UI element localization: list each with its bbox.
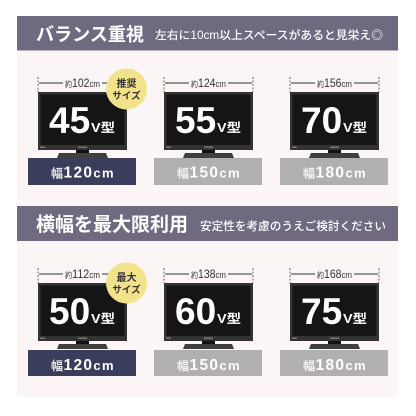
width dimension: 約112cm <box>65 267 100 281</box>
width bar <box>154 158 262 185</box>
size label: 70 <box>301 100 342 141</box>
width bar <box>28 158 136 185</box>
item: 50V <box>28 262 147 376</box>
heading: balance: バランス重視 <box>36 24 144 45</box>
panel: max width section <box>17 206 398 376</box>
item: 75V <box>280 267 388 376</box>
width dimension: 約168cm <box>317 267 352 281</box>
size label: 55 <box>175 100 216 141</box>
heading bar: max width <box>17 206 398 241</box>
width bar: 幅 <box>177 358 189 373</box>
recommended badge: サイズ <box>112 90 141 102</box>
recommended badge <box>106 68 147 110</box>
width bar: 幅 <box>51 166 63 180</box>
width bar: 幅 <box>51 358 63 373</box>
subheading: balance: 左右に10cm以上スペースがあると見栄え◎ <box>155 28 383 42</box>
width bar: 150cm <box>190 164 240 182</box>
width bar: 150cm <box>190 357 240 374</box>
panel: background <box>17 50 398 397</box>
size label: 60 <box>175 291 216 332</box>
width bar: 幅 <box>303 358 315 373</box>
tv icon <box>164 283 253 349</box>
size label: 45 <box>49 100 90 141</box>
size label: 50 <box>49 291 90 332</box>
width bar <box>154 350 262 376</box>
width dimension: 約156cm <box>317 76 352 90</box>
max badge: サイズ <box>112 284 141 296</box>
tv icon <box>164 92 253 158</box>
width bar: 幅 <box>303 166 315 180</box>
heading: max width: 横幅を最大限利用 <box>36 214 188 236</box>
size unit: V型 <box>91 121 115 135</box>
item: 45V <box>28 68 147 185</box>
width dimension: 約124cm <box>191 76 226 90</box>
width bar <box>28 350 136 376</box>
size unit: V型 <box>343 312 367 326</box>
tv icon <box>290 92 379 158</box>
tv icon <box>290 283 379 349</box>
subheading: max width: 安定性を考慮のうえご検討ください <box>200 219 386 233</box>
panel: balance section <box>17 16 398 185</box>
size unit: V型 <box>343 121 367 135</box>
width dimension: 約102cm <box>65 76 100 90</box>
max badge: 最大 <box>116 271 136 284</box>
width dimension: 約138cm <box>191 267 226 281</box>
width bar <box>280 158 388 185</box>
size unit: V型 <box>91 312 115 326</box>
width bar: 180cm <box>316 357 366 374</box>
item: 60V <box>154 267 262 376</box>
item: 55V <box>154 76 262 185</box>
max badge <box>106 262 147 304</box>
width bar: 120cm <box>64 164 114 182</box>
width bar: 180cm <box>316 164 366 182</box>
size label: 75 <box>301 291 342 332</box>
tv icon <box>38 92 127 158</box>
recommended badge: 推奨 <box>116 77 136 90</box>
width bar: 幅 <box>177 166 189 180</box>
tv icon <box>38 283 127 349</box>
size unit: V型 <box>217 121 241 135</box>
size unit: V型 <box>217 312 241 326</box>
item: 70V <box>280 76 388 185</box>
heading bar: balance <box>17 16 398 50</box>
width bar: 120cm <box>64 357 114 374</box>
width bar <box>280 350 388 376</box>
